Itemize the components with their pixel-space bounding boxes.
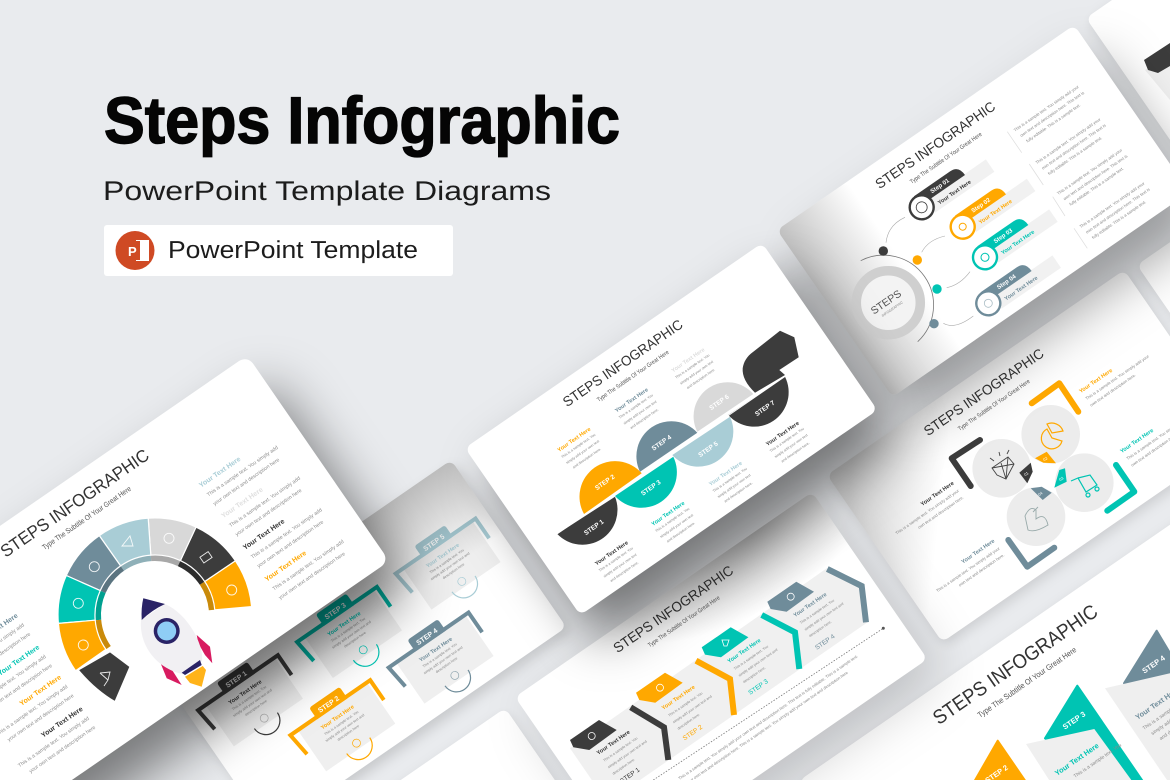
text: left top: own text and description here. bbox=[917, 495, 965, 530]
step 5 block: This is a sample text. You bbox=[429, 548, 465, 575]
step 02 pill: Step 02 bbox=[970, 196, 992, 215]
text: left bottom: own text and description here. bbox=[957, 552, 1005, 588]
title: STEPS INFOGRAPHIC bbox=[560, 316, 686, 410]
slide card: chevron steps bbox=[515, 492, 942, 780]
step 2 block: description here bbox=[337, 724, 360, 742]
step 1 block: simply add your own text and bbox=[232, 688, 273, 718]
text block: step 2: simply add your own text bbox=[565, 439, 600, 465]
text block: step 7: Your Text Here bbox=[765, 421, 801, 448]
slide card: bottom centre-left bbox=[208, 708, 622, 780]
text block: step 1 bbox=[593, 540, 642, 585]
subtitle: Type The Subtitle Of Your Great Here bbox=[596, 349, 671, 404]
left text 1 bbox=[0, 613, 32, 685]
numbered wedges bbox=[1019, 452, 1067, 500]
step 3 block: simply add your own text and bbox=[331, 620, 372, 650]
right text 4: your own text and description here bbox=[278, 551, 347, 601]
step 4 text: This is a sample text. You bbox=[799, 599, 835, 625]
text block: step 5: simply add your own text bbox=[717, 473, 752, 499]
step 04 pill bbox=[970, 247, 1062, 322]
right text 4: This is a sample text. You simply add bbox=[272, 539, 345, 592]
step labels: STEP 3 bbox=[640, 479, 663, 497]
descriptions: fully editable. This is a sample text. bbox=[1047, 135, 1103, 176]
descriptions: fully editable. This is a sample text. bbox=[1091, 199, 1147, 240]
text block: step 1: and description here. bbox=[609, 561, 639, 583]
text block: step 7: This is a sample text. You bbox=[769, 427, 805, 453]
text block: step 2: This is a sample text. You bbox=[560, 433, 596, 459]
step labels: STEP 6 bbox=[708, 393, 731, 412]
step 2 text: simply add your own text and bbox=[672, 695, 713, 724]
step 04 pill: Your Text Here bbox=[1004, 275, 1039, 302]
right text 4: Your Text Here bbox=[264, 550, 308, 583]
text block: step 4: Your Text Here bbox=[614, 387, 650, 414]
step 1 text: Your Text Here bbox=[596, 730, 632, 757]
slide card: circle steps bbox=[777, 25, 1170, 425]
subtitle: Type The Subtitle Of Your Great Here bbox=[909, 131, 984, 186]
text: right top: Your Text Here bbox=[1078, 368, 1114, 395]
text block: step 1: This is a sample text. You bbox=[598, 546, 634, 573]
chevrons bbox=[631, 569, 866, 760]
right text 2 bbox=[220, 465, 308, 538]
subtitle: Type The Subtitle Of Your Great Here bbox=[647, 594, 722, 649]
step 03 pill: Step 03 bbox=[992, 227, 1015, 245]
step 2 block: simply add your own text and bbox=[325, 713, 365, 743]
icon: pie chart bbox=[1041, 423, 1063, 449]
timeline arc with dots bbox=[861, 246, 942, 342]
subtitle: PowerPoint Template Diagrams bbox=[103, 176, 551, 206]
text block: step 4: simply add your own text bbox=[623, 400, 658, 425]
text: left top bbox=[889, 480, 965, 542]
icon: PowerPoint logo: P bbox=[128, 244, 137, 259]
description ticks bbox=[1007, 132, 1087, 248]
left text 2 bbox=[0, 644, 54, 716]
ring icons bbox=[73, 533, 237, 686]
text: left bottom: Your Text Here bbox=[961, 538, 996, 565]
badge bbox=[104, 225, 453, 276]
left text 4: Your Text Here bbox=[40, 706, 85, 739]
descriptions: This is a sample text. You simply add your bbox=[1056, 147, 1124, 196]
step 2 text bbox=[661, 680, 717, 731]
numbered wedges: 02 bbox=[1042, 455, 1049, 462]
text block: step 4: and description here. bbox=[629, 408, 659, 430]
step 3 text: This is a sample text. You bbox=[733, 645, 769, 671]
right text 3: your own text and description here bbox=[256, 519, 325, 569]
text block: step 1: Your Text Here bbox=[594, 540, 630, 567]
title: STEPS INFOGRAPHIC bbox=[921, 345, 1047, 439]
icon: cart bbox=[1071, 475, 1099, 497]
text block: step 6: and description here. bbox=[686, 368, 716, 390]
numbered wedges: 03 bbox=[1058, 475, 1065, 482]
step 1 block: description here bbox=[244, 699, 268, 717]
step labels bbox=[583, 393, 777, 537]
step 4 block: This is a sample text. You bbox=[422, 642, 458, 669]
descriptions: This is a sample text. You simply add your bbox=[1078, 180, 1146, 229]
dotted line bbox=[653, 627, 885, 780]
descriptions: own text and description here. This text is bbox=[1019, 90, 1085, 138]
step labels bbox=[619, 633, 837, 780]
step 02 pill bbox=[944, 170, 1036, 245]
text block: step 3: and description here. bbox=[666, 521, 696, 543]
text block: step 7 bbox=[764, 420, 813, 466]
text block: step 6 bbox=[670, 347, 719, 392]
step 3 block: STEP 3 bbox=[324, 602, 348, 621]
triangle step 3: This is a sample text. You bbox=[1073, 742, 1123, 780]
central ring: STEPS bbox=[869, 288, 904, 317]
central ring: INFOGRAPHIC bbox=[881, 300, 904, 318]
step 3 block: Your Text Here bbox=[327, 611, 362, 638]
triangle step 3 bbox=[1026, 686, 1143, 780]
title: STEPS INFOGRAPHIC bbox=[0, 445, 153, 561]
text: right top bbox=[1078, 346, 1155, 408]
triangle step 4 bbox=[1105, 631, 1170, 780]
text block: step 7: and description here. bbox=[780, 441, 810, 463]
step labels: STEP 4 bbox=[651, 434, 673, 452]
main title: Steps Infographic bbox=[104, 83, 620, 157]
descriptions: This is a sample text. You simply add your bbox=[1034, 116, 1102, 165]
triangle step 3: STEP 3 bbox=[1061, 709, 1087, 731]
connector curves bbox=[886, 217, 973, 325]
descriptions bbox=[1013, 84, 1155, 242]
text: right middle: Your Text Here bbox=[1119, 428, 1155, 455]
text block: step 5 bbox=[707, 460, 756, 506]
step 1 block: Your Text Here bbox=[228, 679, 263, 706]
step 04 pill: Step 04 bbox=[996, 273, 1018, 291]
corner brackets bbox=[952, 383, 1134, 567]
text: left top: Your Text Here bbox=[920, 481, 955, 508]
slide card: petal steps bbox=[827, 270, 1170, 646]
triangle step 2 bbox=[974, 741, 1026, 780]
step 3 text bbox=[727, 633, 783, 685]
step 3 text: Your Text Here bbox=[727, 638, 762, 665]
right text 2: your own text and description here bbox=[235, 488, 303, 538]
slide card: right edge bbox=[1137, 60, 1170, 436]
step 1 block: This is a sample text. You bbox=[231, 685, 267, 711]
step labels: STEP 5 bbox=[697, 440, 720, 459]
step 02 pill: Your Text Here bbox=[978, 199, 1014, 226]
text: right top: own text and description here. bbox=[1089, 372, 1137, 408]
text block: step 2: and description here. bbox=[572, 447, 602, 469]
right text 2: Your Text Here bbox=[220, 486, 265, 520]
text: left bottom bbox=[930, 538, 1006, 600]
descriptions: fully editable. This is a sample text. bbox=[1068, 166, 1125, 207]
descriptions: own text and description here. This text is bbox=[1041, 123, 1107, 171]
step 1 block bbox=[191, 645, 313, 761]
text: right middle bbox=[1119, 406, 1170, 468]
slide card: triangle steps bbox=[797, 501, 1170, 780]
title: STEPS INFOGRAPHIC bbox=[929, 601, 1102, 729]
step 01 pill: Step 01 bbox=[929, 177, 951, 195]
text block: step 3: This is a sample text. You bbox=[654, 507, 690, 533]
step 2 text: This is a sample text. You bbox=[668, 691, 703, 718]
descriptions: own text and description here. This text is bbox=[1062, 153, 1128, 201]
step 3 text: description here. bbox=[742, 666, 766, 684]
step 3 block: description here bbox=[343, 631, 367, 649]
step 5 block: simply add your own text and bbox=[430, 551, 470, 581]
step 1 block: STEP 1 bbox=[225, 670, 249, 690]
text block: step 6: simply add your own text bbox=[679, 360, 714, 385]
numbered wedges: 01 bbox=[1023, 470, 1030, 477]
step 1 text: This is a sample text. You bbox=[603, 736, 638, 763]
text block: step 6: This is a sample text. You bbox=[674, 353, 710, 380]
step 01 pill bbox=[903, 151, 995, 226]
left text 3: Your Text Here bbox=[19, 674, 63, 708]
step 4 block: Your Text Here bbox=[418, 637, 454, 664]
step 3 block bbox=[290, 577, 412, 692]
slide card: rocket ring bbox=[0, 355, 413, 780]
text: right top: This is a sample text. You simply add your bbox=[1084, 353, 1150, 401]
left text 3 bbox=[0, 674, 75, 746]
right text 1: your own text and description here bbox=[212, 457, 281, 507]
triangle step 4: STEP 4 bbox=[1140, 653, 1167, 675]
subtitle: Type The Subtitle Of Your Great Here bbox=[40, 484, 133, 552]
left text 3: your own text and description here bbox=[7, 693, 75, 743]
text block: step 3: Your Text Here bbox=[651, 501, 686, 528]
step 4 text: description here. bbox=[808, 620, 832, 638]
right text 3: This is a sample text. You simply add bbox=[250, 507, 324, 561]
icon: PowerPoint logo bbox=[116, 231, 154, 270]
slide card: wave steps bbox=[465, 243, 899, 643]
step 1 text: description here. bbox=[612, 757, 636, 776]
end arrow shape bbox=[743, 331, 799, 393]
left text 4: your own text and description here bbox=[28, 725, 97, 775]
text block: step 3 bbox=[650, 500, 699, 546]
step labels: STEP 2 bbox=[682, 724, 704, 742]
step 01 pill: Your Text Here bbox=[937, 179, 973, 206]
title: STEPS INFOGRAPHIC bbox=[610, 562, 736, 656]
descriptions: fully editable. This is a sample text. bbox=[1025, 102, 1081, 143]
text block: step 2: Your Text Here bbox=[557, 427, 592, 454]
step 3 block: This is a sample text. You bbox=[330, 617, 366, 643]
step 2 text: description here. bbox=[677, 712, 701, 731]
step labels: STEP 1 bbox=[583, 518, 606, 537]
bottom description: This is a sample text. You simply add your own text and description here. This text is fully editable. This is a sample text. bbox=[677, 653, 859, 780]
numbered wedges: 04 bbox=[1037, 490, 1044, 497]
grey band bbox=[570, 568, 868, 780]
text block: step 5: and description here. bbox=[723, 481, 753, 503]
badge label: PowerPoint Template bbox=[168, 237, 418, 264]
petal circles bbox=[972, 405, 1114, 546]
step 2 text: Your Text Here bbox=[661, 685, 697, 712]
text: left top: This is a sample text. You simply add your bbox=[894, 488, 960, 536]
descriptions: This is a sample text. You simply add your bbox=[1013, 84, 1080, 133]
flag tabs bbox=[570, 582, 814, 750]
step 4 block: description here bbox=[435, 656, 458, 674]
right text 3 bbox=[242, 497, 330, 570]
left text 4: This is a sample text. You simply add bbox=[17, 716, 91, 769]
right text 3: Your Text Here bbox=[242, 518, 286, 552]
step 2 block: Your Text Here bbox=[320, 704, 356, 731]
step 2 block bbox=[284, 670, 405, 780]
right text 2: This is a sample text. You simply add bbox=[228, 476, 302, 529]
text block: step 1: simply add your own text bbox=[603, 553, 638, 578]
text: left bottom: This is a sample text. You simply add your bbox=[935, 545, 1001, 593]
slide card: top right corner bbox=[1086, 0, 1170, 189]
step 03 pill bbox=[966, 201, 1058, 276]
slide card: tabbed steps bbox=[154, 460, 571, 780]
step 5 block: STEP 5 bbox=[422, 534, 446, 553]
step 1 text: simply add your own text and bbox=[607, 740, 648, 769]
step 5 block bbox=[389, 509, 510, 624]
step 03 pill: Your Text Here bbox=[1000, 229, 1036, 256]
step 4 block bbox=[382, 603, 503, 718]
text block: step 2 bbox=[556, 426, 605, 472]
step labels: STEP 2 bbox=[594, 473, 617, 492]
left text 4 bbox=[10, 706, 97, 778]
subtitle: Type The Subtitle Of Your Great Here bbox=[976, 645, 1079, 720]
descriptions: own text and description here. This text is bbox=[1085, 187, 1151, 235]
text block: step 4 bbox=[613, 387, 662, 432]
step 1 text bbox=[596, 725, 652, 776]
step 4 text bbox=[793, 587, 849, 639]
text block: step 5: This is a sample text. You bbox=[712, 467, 748, 493]
right text 1: Your Text Here bbox=[198, 456, 242, 489]
title: STEPS INFOGRAPHIC bbox=[872, 98, 998, 192]
subtitle: Type The Subtitle Of Your Great Here bbox=[957, 378, 1032, 433]
step 3 text: simply add your own text and bbox=[738, 648, 778, 678]
step 5 block: description here bbox=[442, 562, 465, 580]
icon: muscle arm bbox=[1025, 507, 1048, 531]
segmented ring bbox=[58, 518, 252, 702]
step 5 block: Your Text Here bbox=[425, 543, 461, 570]
text block: step 4: This is a sample text. You bbox=[618, 393, 654, 420]
step 2 block: STEP 2 bbox=[317, 695, 341, 715]
icon: diamond bbox=[990, 450, 1014, 479]
step labels: STEP 3 bbox=[747, 678, 770, 697]
step labels: STEP 4 bbox=[814, 633, 837, 652]
step 4 block: STEP 4 bbox=[415, 628, 439, 647]
central ring bbox=[856, 271, 920, 335]
rocket bbox=[141, 598, 212, 687]
step 4 text: simply add your own text and bbox=[804, 602, 844, 632]
step 4 text: Your Text Here bbox=[793, 592, 828, 619]
text block: step 3: simply add your own text bbox=[659, 513, 694, 539]
text block: step 5: Your Text Here bbox=[708, 461, 744, 488]
step 2 block: This is a sample text. You bbox=[324, 710, 359, 736]
step 4 block: simply add your own text and bbox=[423, 645, 463, 675]
step labels: STEP 7 bbox=[754, 399, 777, 418]
right text 1: This is a sample text. You simply add bbox=[206, 445, 280, 498]
triangle step 3: Your Text Here bbox=[1053, 741, 1101, 778]
semicircle chain bbox=[557, 376, 789, 545]
right text 1 bbox=[198, 435, 286, 508]
right text 4 bbox=[264, 529, 351, 602]
text block: step 6: Your Text Here bbox=[671, 347, 706, 374]
text block: step 7: simply add your own text bbox=[774, 433, 809, 459]
